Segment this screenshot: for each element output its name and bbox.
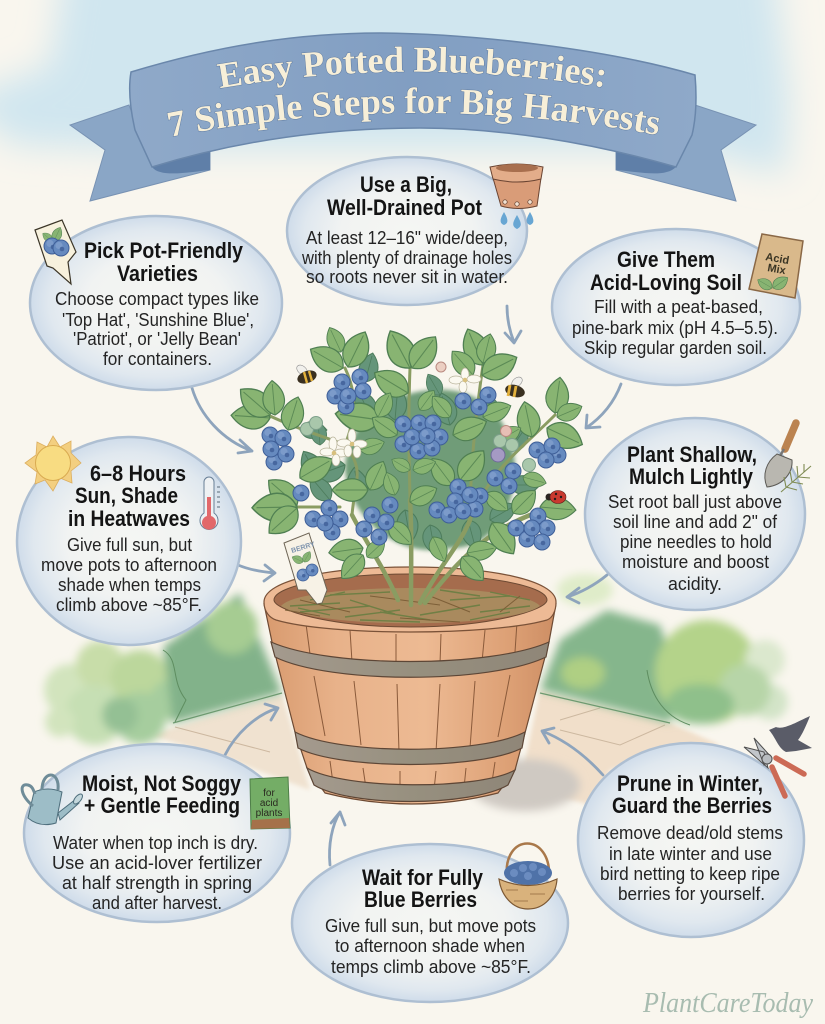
- heading line 2: Mulch Lightly: [629, 464, 754, 489]
- ribbon tail: right: [616, 105, 756, 201]
- body text line 2: with plenty of drainage holes: [301, 248, 512, 268]
- barrel rim: [264, 567, 556, 632]
- heading: Use a Big,: [360, 172, 452, 197]
- panel: use a big pot: [287, 157, 543, 305]
- arrow: plant shallow: [567, 575, 607, 603]
- body text line 3: 'Patriot', or 'Jelly Bean': [73, 329, 241, 349]
- stems: [270, 365, 555, 605]
- icon: acid mix bag: Acid: [764, 251, 790, 267]
- heading line 2: + Gentle Feeding: [84, 793, 240, 818]
- icon: berry basket: [499, 844, 557, 909]
- panel: pick varieties: [30, 216, 282, 390]
- patio paving: [150, 690, 720, 805]
- body text: Give full sun, but: [67, 535, 192, 555]
- body text line 2: Use an acid-lover fertilizer: [52, 853, 262, 873]
- iron hoop bottom: [307, 768, 515, 802]
- body text line 5: acidity.: [668, 574, 722, 594]
- body text line 4: climb above ~85°F.: [56, 595, 202, 615]
- icon: fertilizer bag: [250, 777, 290, 829]
- body text line 4: and after harvest.: [92, 893, 222, 913]
- ladybug: [546, 490, 566, 504]
- arrow: sun: [238, 565, 275, 581]
- body text line 3: Skip regular garden soil.: [584, 338, 767, 358]
- heading line 2: Blue Berries: [364, 887, 477, 912]
- heading: Plant Shallow,: [627, 442, 757, 467]
- barrel planter: [264, 567, 556, 804]
- heading: Pick Pot-Friendly: [84, 238, 244, 263]
- body text line 2: soil line and add 2" of: [613, 512, 778, 532]
- arrow: pot step: [505, 306, 521, 343]
- icon: pruners: [744, 738, 804, 796]
- icon: pine sprig: [781, 464, 811, 492]
- panel: sun and shade: [17, 436, 241, 645]
- iron hoop top: [271, 642, 549, 677]
- heading line 3: in Heatwaves: [68, 506, 190, 531]
- body text line 3: bird netting to keep ripe: [600, 864, 780, 884]
- bee: right: [504, 375, 526, 399]
- heading: Wait for Fully: [362, 865, 484, 890]
- body text line 4: for containers.: [103, 349, 212, 369]
- arrow: prune: [542, 728, 603, 775]
- pot shadow: [470, 759, 580, 811]
- arrow: soil: [586, 384, 621, 428]
- icon: watering can: [22, 775, 84, 825]
- body text line 2: to afternoon shade when: [335, 936, 525, 956]
- dense foliage backdrop: [345, 390, 515, 550]
- panel: give them acid-loving soil: [552, 229, 803, 385]
- bush: right: [540, 574, 788, 725]
- bush: left: [44, 593, 282, 745]
- body text: Remove dead/old stems: [597, 823, 783, 843]
- body text line 3: pine needles to hold: [620, 532, 772, 552]
- bee: left: [295, 363, 318, 386]
- body text line 4: berries for yourself.: [618, 884, 765, 904]
- body text line 3: temps climb above ~85°F.: [331, 957, 531, 977]
- icon: fertilizer bag: for: [263, 788, 276, 799]
- heading: Moist, Not Soggy: [82, 771, 242, 796]
- title text: Easy Potted Blueberries:: [216, 46, 605, 89]
- icon: thermometer: [200, 477, 220, 530]
- blueberry clusters: [262, 369, 566, 550]
- heading line 2: Acid-Loving Soil: [590, 270, 742, 295]
- arrow: varieties: [192, 388, 252, 453]
- heading line 2: Sun, Shade: [75, 483, 178, 508]
- body text: Set root ball just above: [608, 492, 782, 512]
- icon: seed tag: [35, 220, 76, 284]
- arrow: wait: [329, 812, 345, 865]
- body text line 2: 'Top Hat', 'Sunshine Blue',: [62, 310, 254, 330]
- panel: moist not soggy: [22, 744, 290, 922]
- body text: Choose compact types like: [55, 289, 259, 309]
- body text line 2: pine-bark mix (pH 4.5–5.5).: [572, 318, 778, 338]
- icon: pot with drainage drops: [490, 164, 543, 229]
- icon: acid mix bag: Mix: [766, 262, 787, 277]
- body text: Fill with a peat-based,: [594, 297, 763, 317]
- plant tag: [284, 533, 327, 604]
- panel: wait for fully blue berries: [292, 844, 568, 1002]
- plant tag: BERRY: [291, 541, 316, 555]
- ribbon folds: [152, 149, 676, 173]
- body text: Water when top inch is dry.: [53, 833, 258, 853]
- panel: plant shallow: [585, 418, 811, 610]
- sky wash: [0, 0, 790, 175]
- heading: Prune in Winter,: [617, 771, 763, 796]
- foreground leaves: [230, 324, 587, 587]
- iron hoop middle: [295, 732, 525, 764]
- body text line 4: moisture and boost: [622, 552, 769, 572]
- blossoms: [320, 362, 481, 466]
- body text line 2: in late winter and use: [609, 844, 772, 864]
- heading: 6–8 Hours: [90, 461, 186, 486]
- logo: PlantCareToday: PlantCareToday: [642, 988, 814, 1019]
- icon: sun: [25, 436, 81, 491]
- body text line 3: shade when temps: [58, 575, 201, 595]
- barrel body: [264, 604, 556, 804]
- ribbon tail: left: [70, 105, 210, 201]
- barrel staves: [306, 622, 517, 790]
- arrows: [192, 306, 621, 865]
- icon: fertilizer bag: acid: [260, 798, 278, 809]
- title text line 2: 7 Simple Steps for Big Harvests: [166, 86, 660, 137]
- unripe berries: [300, 416, 536, 472]
- heading line 2: Varieties: [117, 261, 198, 286]
- panel: prune in winter: [578, 716, 812, 937]
- background leaves: [295, 351, 540, 556]
- body text line 3: so roots never sit in water.: [306, 267, 508, 287]
- ribbon band: [130, 33, 696, 167]
- body text: Give full sun, but move pots: [325, 916, 536, 936]
- body text line 3: at half strength in spring: [62, 873, 252, 893]
- icon: acid mix bag: [749, 234, 803, 298]
- icon: fertilizer bag: plants: [256, 808, 282, 819]
- heading line 2: Guard the Berries: [612, 793, 772, 818]
- title banner: [69, 32, 757, 202]
- blueberry plant: [230, 324, 587, 605]
- icon: trowel: [765, 423, 796, 487]
- body text line 2: move pots to afternoon: [41, 555, 217, 575]
- body text: At least 12–16" wide/deep,: [306, 228, 508, 248]
- icon: bird: [769, 716, 812, 752]
- soil and pine needles: [281, 588, 540, 623]
- heading line 2: Well-Drained Pot: [327, 195, 483, 220]
- heading: Give Them: [617, 247, 715, 272]
- arrow: moist: [225, 704, 278, 755]
